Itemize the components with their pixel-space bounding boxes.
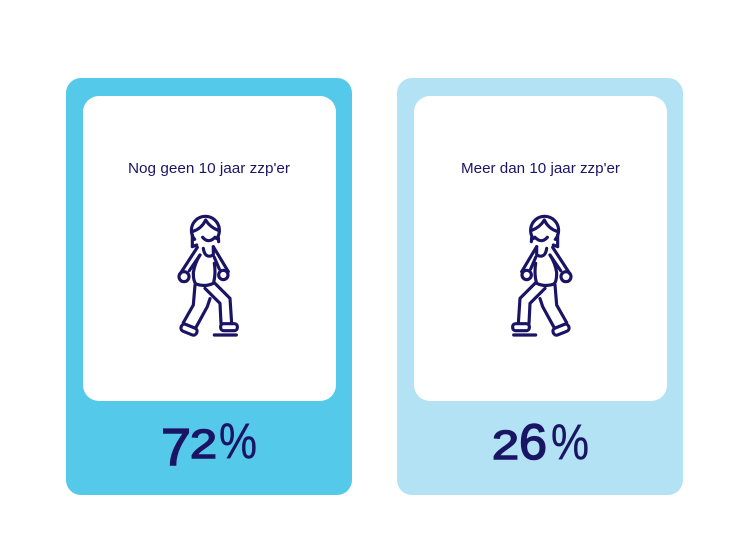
percentage: 72%: 2 xyxy=(190,421,217,467)
percentage: 26%: % xyxy=(551,414,589,470)
percentage: 72%: 7 xyxy=(161,419,191,477)
card background xyxy=(66,78,352,495)
percentage: 26% xyxy=(492,414,589,470)
percentage: 26%: 2 xyxy=(492,422,519,468)
percentage: 72% xyxy=(161,413,257,477)
heading: Nog geen 10 jaar zzp'er xyxy=(128,160,290,177)
white inner panel xyxy=(414,96,667,401)
icon: walking person xyxy=(513,216,571,336)
panel: meer dan 10 jaar xyxy=(397,78,683,495)
white inner panel xyxy=(83,96,336,401)
heading: Meer dan 10 jaar zzp'er xyxy=(461,160,620,177)
percentage: 72%: % xyxy=(219,413,257,469)
icon: walking person xyxy=(179,216,237,336)
panel: nog geen 10 jaar xyxy=(66,78,352,495)
card background xyxy=(397,78,683,495)
percentage: 26%: 6 xyxy=(519,414,547,470)
